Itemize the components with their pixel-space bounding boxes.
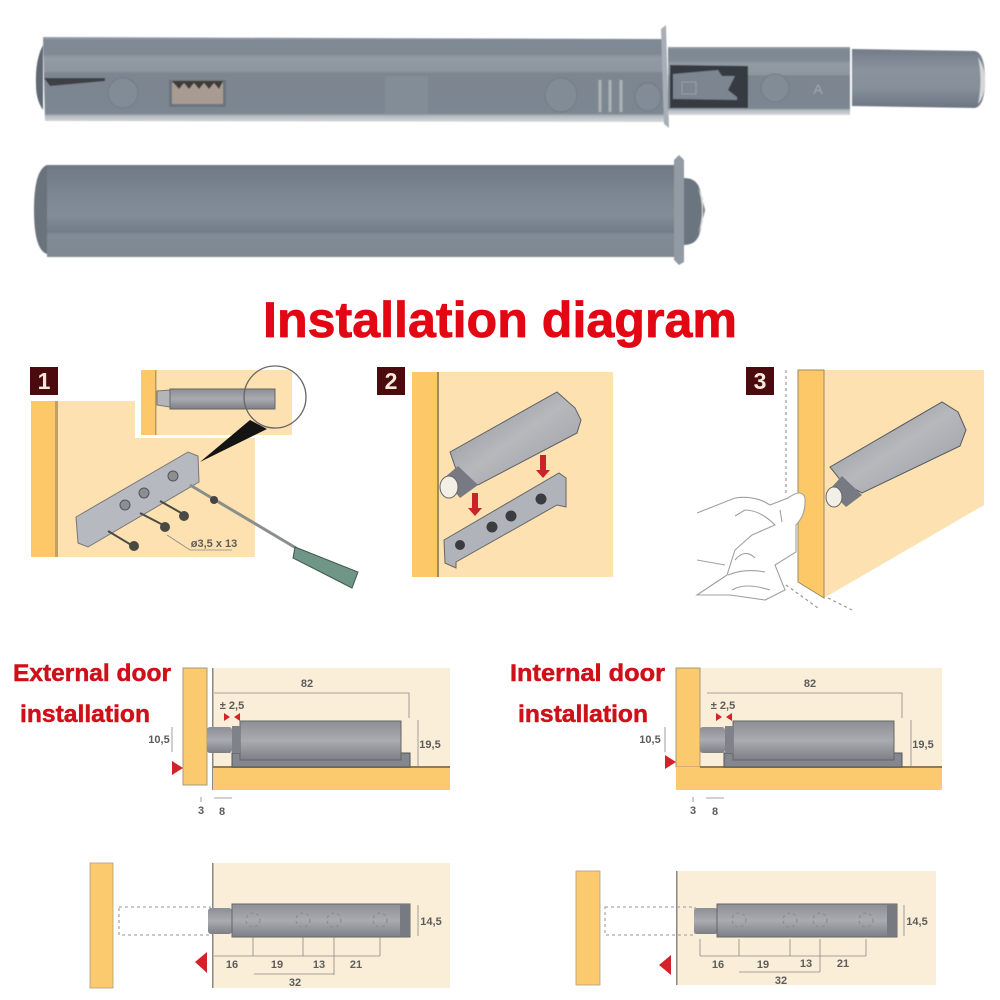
dotted plunger <box>119 907 210 935</box>
diagram: internal door front view: 19 <box>757 959 769 971</box>
plunger <box>852 49 985 108</box>
closed body <box>47 165 677 257</box>
base <box>724 753 902 767</box>
badge 2: 2 <box>385 368 397 394</box>
diagram: external door front view: 32 <box>289 977 301 989</box>
diagram: internal door front view: 21 <box>837 958 849 970</box>
flange <box>674 155 684 265</box>
label: external door installation: External door <box>13 660 171 687</box>
door strip <box>412 372 438 577</box>
red arrows <box>536 455 550 478</box>
product photo: open pusher latch <box>36 25 985 128</box>
metal tip <box>698 188 703 234</box>
plunger <box>444 466 478 498</box>
door <box>676 668 700 767</box>
dimensions: 82 <box>804 678 816 690</box>
door strip <box>31 401 58 557</box>
door edge <box>798 370 824 598</box>
badge 3 <box>746 367 774 395</box>
base <box>232 753 410 767</box>
plunger tip <box>978 57 985 104</box>
door <box>576 871 600 985</box>
red pointer <box>195 952 207 973</box>
diagram: external door front view: 14,5 <box>420 916 442 928</box>
bracket <box>444 473 566 568</box>
badge 1: 1 <box>38 368 51 394</box>
centre band <box>385 76 428 114</box>
cabinet side <box>213 668 450 768</box>
product photo: closed pusher latch <box>34 155 705 265</box>
diagram: internal door front view: 16 <box>712 959 724 971</box>
beige wall <box>412 372 613 577</box>
label: internal door installation: installation <box>518 701 648 728</box>
shelf <box>676 767 942 790</box>
dotted outlines <box>786 370 852 610</box>
diagram: external door front view: 19 <box>271 959 283 971</box>
latch <box>240 721 401 760</box>
diagram: external door front view: 21 <box>350 959 362 971</box>
ribs <box>594 79 631 113</box>
toothed window <box>169 80 226 107</box>
label: external door installation <box>13 660 171 728</box>
bracket <box>76 452 199 547</box>
moulded ovals <box>108 78 138 108</box>
diagram: external door side view: 3 <box>198 805 204 817</box>
mid section <box>668 47 850 115</box>
dimensions <box>214 905 418 975</box>
magnifier wedge <box>200 420 267 462</box>
diagram: internal door side view: ± 2,5 <box>711 700 735 712</box>
screws <box>108 501 188 550</box>
diagram: internal door side view: 3 <box>690 805 696 817</box>
panel: step 1 <box>30 366 358 588</box>
diagram: external door side view: 8 <box>219 806 225 818</box>
inset view <box>135 366 306 438</box>
dimensions: 82 <box>301 678 313 690</box>
dimensions <box>700 905 904 972</box>
nub <box>700 727 725 753</box>
diagram: internal door front view <box>576 871 936 987</box>
diagram: internal door front view: 32 <box>775 975 787 987</box>
diagram: internal door side view: 8 <box>712 806 718 818</box>
diagram: internal door side view: 10,5 <box>639 734 661 746</box>
flange <box>661 25 669 128</box>
latch <box>733 721 894 760</box>
end cap <box>36 45 43 110</box>
sliding window <box>670 65 748 108</box>
label: internal door installation <box>510 660 665 728</box>
dotted plunger <box>605 907 695 935</box>
label: external door installation: installation <box>20 701 150 728</box>
nub <box>207 727 232 753</box>
label: internal door installation: Internal door <box>510 660 665 687</box>
red pointer <box>665 755 676 769</box>
plunger <box>829 476 862 507</box>
badge 1 <box>30 367 58 395</box>
beige wall <box>58 401 255 557</box>
diagram: external door side view <box>148 668 450 818</box>
letter A: A <box>813 81 823 97</box>
diagram: internal door front view: 14,5 <box>906 916 928 928</box>
red pointer <box>172 761 183 775</box>
size label: ø3,5 x 13 <box>191 538 237 550</box>
spring slot <box>44 78 105 86</box>
latch <box>208 908 232 934</box>
diagram: external door front view <box>90 863 450 989</box>
shelf <box>213 767 450 790</box>
latch <box>694 908 718 934</box>
latch body <box>43 37 664 122</box>
door <box>183 668 207 785</box>
diagram: internal door side view <box>639 668 942 818</box>
latch <box>830 402 966 493</box>
panel: step 3 <box>697 367 984 610</box>
diagram: external door side view: 10,5 <box>148 734 170 746</box>
screwdriver <box>190 485 296 548</box>
nub <box>684 178 705 245</box>
title: Installation diagram <box>263 292 737 348</box>
end cap <box>34 165 47 254</box>
red pointer <box>659 955 671 975</box>
door <box>90 863 113 988</box>
diagram: internal door side view: 19,5 <box>912 739 934 751</box>
diagram: internal door front view: 13 <box>800 958 812 970</box>
diagram: external door side view: ± 2,5 <box>220 700 244 712</box>
panel: step 2 <box>377 367 613 577</box>
beige door face <box>824 370 984 598</box>
hand <box>697 493 805 600</box>
catch in window <box>673 70 737 100</box>
badge 2 <box>377 367 405 395</box>
badge 3: 3 <box>754 368 766 394</box>
latch <box>450 392 581 485</box>
diagram: external door side view: 19,5 <box>419 739 441 751</box>
diagram: external door front view: 13 <box>313 959 325 971</box>
diagram: external door front view: 16 <box>226 959 238 971</box>
